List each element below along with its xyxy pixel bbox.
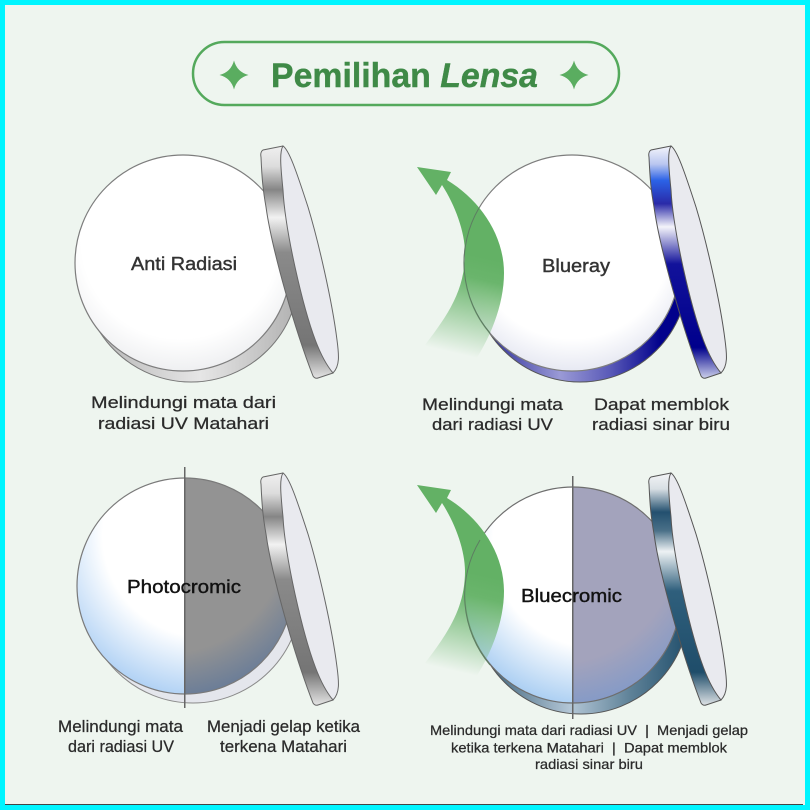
icon: right sparkle xyxy=(560,60,588,90)
lens side view xyxy=(261,473,338,705)
description right xyxy=(207,717,361,756)
description xyxy=(91,393,276,433)
lens back rim xyxy=(473,498,689,714)
description left: dari radiasi UV xyxy=(68,737,175,756)
description: radiasi sinar biru xyxy=(535,756,643,772)
lens side view xyxy=(649,146,726,378)
description left: dari radiasi UV xyxy=(432,415,554,434)
lens label: Bluecromic xyxy=(521,586,622,606)
description: Melindungi mata dari xyxy=(91,393,276,412)
description xyxy=(430,722,748,772)
lens outline through arrow xyxy=(465,540,490,665)
description: radiasi UV Matahari xyxy=(98,414,269,433)
lens outline xyxy=(77,478,293,694)
lens back rim xyxy=(83,166,299,382)
lens outline xyxy=(465,487,681,703)
arrow: deflected UV xyxy=(417,167,504,368)
description right xyxy=(592,395,730,434)
lens front face clear half xyxy=(465,487,573,703)
title banner xyxy=(193,42,619,105)
description right: Menjadi gelap ketika xyxy=(207,717,361,736)
lens front face xyxy=(75,155,291,371)
panel: Blueray xyxy=(417,146,730,434)
divider line xyxy=(572,476,574,719)
panel: Anti Radiasi xyxy=(75,146,338,433)
lens side view xyxy=(649,473,726,705)
lens label: Anti Radiasi xyxy=(131,254,237,274)
panel: Bluecromic xyxy=(417,473,748,772)
arrow: deflected UV xyxy=(417,485,504,686)
lens front face tinted half xyxy=(573,487,681,703)
lens label: Blueray xyxy=(542,256,610,276)
lens front face clear half xyxy=(77,478,185,694)
lens back rim xyxy=(472,166,688,382)
description right: terkena Matahari xyxy=(220,737,347,756)
title text: Pemilihan Lensa xyxy=(271,57,538,95)
description left: Melindungi mata xyxy=(422,395,564,414)
description right: radiasi sinar biru xyxy=(592,415,730,434)
description: Melindungi mata dari radiasi UV | Menjadi gelap xyxy=(430,722,748,738)
description: ketika terkena Matahari | Dapat memblok xyxy=(451,740,728,756)
description left xyxy=(58,717,184,756)
lens label: Photocromic xyxy=(127,577,241,597)
lens front face dark half xyxy=(185,478,293,694)
lens outline through arrow xyxy=(464,208,490,333)
lens front face xyxy=(464,155,680,371)
description left xyxy=(422,395,564,434)
lens side view xyxy=(261,146,338,378)
divider line xyxy=(184,467,186,708)
description right: Dapat memblok xyxy=(594,395,730,414)
lens back rim xyxy=(85,487,301,703)
description left: Melindungi mata xyxy=(58,717,184,736)
panel: Photocromic xyxy=(58,467,361,756)
icon: left sparkle xyxy=(220,60,248,90)
